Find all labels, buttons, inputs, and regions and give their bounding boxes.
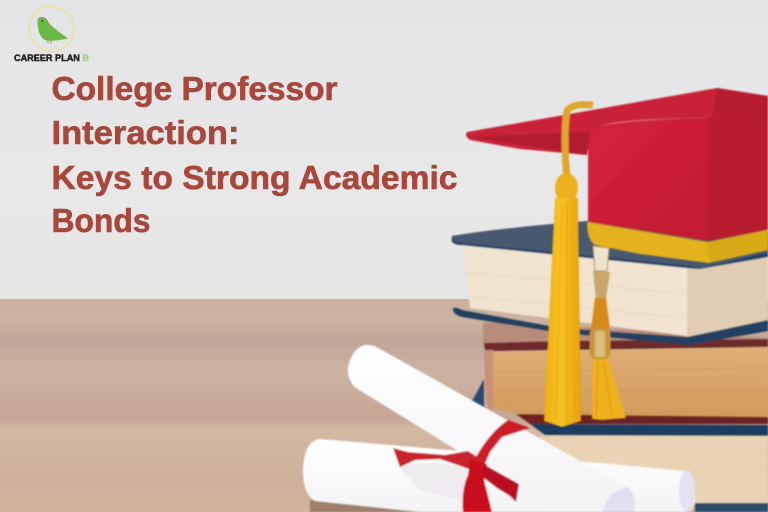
title [52, 70, 458, 239]
icon: green bird [37, 17, 68, 44]
red ribbon [393, 420, 530, 512]
lower diploma [303, 439, 695, 512]
top cover [452, 221, 768, 268]
mortarboard top [466, 88, 768, 155]
main tassel [544, 198, 581, 427]
logo [14, 6, 90, 63]
scroll shadow [310, 500, 470, 512]
bottom book [471, 379, 768, 512]
graduation cap [466, 88, 768, 427]
cap body right side [708, 118, 768, 241]
logo wordmark: CAREER PLAN B [14, 53, 90, 63]
bottom cover [453, 308, 768, 345]
tassel cord [565, 105, 593, 178]
middle book [483, 322, 768, 424]
title: Bonds [52, 202, 150, 239]
diplomas [303, 345, 695, 512]
cap body front [588, 118, 708, 241]
title: College Professor [52, 70, 338, 107]
book stack [452, 221, 768, 512]
top book [452, 221, 768, 345]
wooden table [0, 299, 768, 512]
background wall [0, 0, 768, 300]
title: Keys to Strong Academic [52, 159, 458, 196]
logo ring [29, 6, 74, 52]
title: Interaction: [52, 114, 240, 151]
small tassel [590, 246, 626, 420]
gold band [587, 222, 768, 263]
tassel knot [555, 173, 578, 203]
upper diploma [348, 345, 635, 512]
